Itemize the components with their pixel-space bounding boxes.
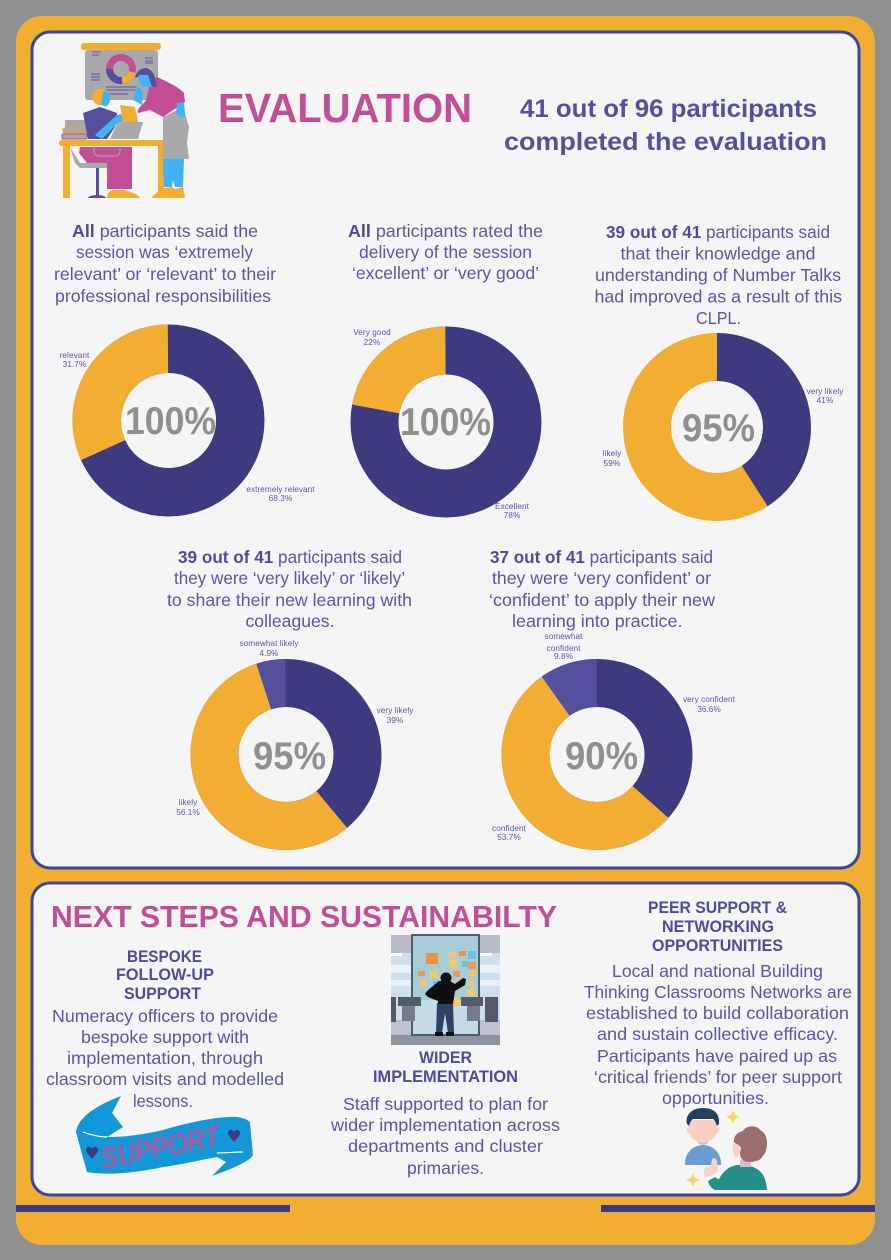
column: bespoke follow-up support: FOLLOW-UP bbox=[116, 966, 214, 984]
donut chart: sharing 95%: 39% bbox=[387, 716, 403, 725]
donut chart: knowledge 95%: 41% bbox=[817, 396, 833, 405]
text: knowledge statement: had improved as a result of this bbox=[594, 286, 842, 306]
donut chart: sharing 95% bbox=[176, 639, 414, 826]
text: sharing statement: colleagues. bbox=[246, 611, 334, 631]
donut chart: confidence 90%: very confident bbox=[683, 695, 736, 704]
participants summary: 41 out of 96 participants bbox=[520, 95, 817, 123]
donut chart: sharing 95%: very likely bbox=[377, 706, 414, 715]
text: relevance statement: professional responsibilities bbox=[55, 286, 271, 306]
text: knowledge statement bbox=[594, 222, 842, 328]
column: wider implementation: departments and cluster bbox=[348, 1136, 543, 1156]
participants summary bbox=[504, 95, 827, 156]
donut chart: confidence 90%: 9.8% bbox=[554, 652, 573, 661]
text: confidence statement: ‘confident’ to apply their new bbox=[489, 590, 715, 610]
icon: support ribbon: SUPPORT bbox=[98, 1120, 224, 1174]
column: bespoke follow-up support: Numeracy officers to provide bbox=[52, 1006, 278, 1026]
text: relevance statement: session was ‘extremely bbox=[76, 242, 253, 262]
donut chart: confidence 90%: 90% bbox=[565, 735, 638, 778]
text: confidence statement bbox=[489, 547, 715, 631]
column: wider implementation bbox=[330, 1049, 560, 1178]
donut chart: knowledge 95%: likely bbox=[603, 449, 622, 458]
donut chart: sharing 95%: 4.9% bbox=[260, 649, 278, 658]
text: confidence statement: learning into practice. bbox=[512, 611, 682, 631]
donut chart: relevance 100% bbox=[60, 349, 315, 503]
column: bespoke follow-up support bbox=[46, 948, 284, 1111]
text: relevance statement: relevant’ or ‘relevant’ to their bbox=[54, 264, 276, 284]
donut chart: knowledge 95% bbox=[603, 357, 844, 497]
donut chart: sharing 95%: likely bbox=[179, 798, 198, 807]
donut chart: delivery 100%: Excellent bbox=[495, 502, 530, 511]
donut chart: sharing 95%: 56.1% bbox=[176, 808, 200, 817]
donut chart: confidence 90% bbox=[492, 632, 736, 842]
donut chart: delivery 100%: 100% bbox=[400, 401, 491, 444]
column: peer support and networking: Thinking Classrooms Networks are bbox=[584, 982, 852, 1002]
column: peer support and networking: Local and national Building bbox=[612, 961, 823, 981]
column: peer support and networking: and sustain collective efficacy. bbox=[597, 1024, 838, 1044]
footer bar right bbox=[601, 1205, 875, 1212]
column: peer support and networking: NETWORKING bbox=[662, 918, 774, 936]
column: wider implementation: IMPLEMENTATION bbox=[373, 1068, 518, 1086]
column: peer support and networking: ‘critical friends’ for peer support bbox=[594, 1067, 842, 1087]
donut chart: delivery 100% bbox=[353, 328, 530, 520]
donut chart: sharing 95%: somewhat likely bbox=[240, 639, 299, 648]
text: sharing statement: they were ‘very likely’ or ‘likely’ bbox=[174, 568, 405, 588]
text: relevance statement bbox=[54, 221, 276, 306]
column: bespoke follow-up support: bespoke support with bbox=[81, 1027, 249, 1047]
text: sharing statement: to share their new learning with bbox=[167, 590, 412, 610]
donut chart: relevance 100%: 100% bbox=[125, 400, 216, 443]
donut chart: delivery 100%: Very good bbox=[353, 328, 391, 337]
icon: person at sticky note wall bbox=[391, 935, 500, 1045]
column: peer support and networking: established to build collaboration bbox=[586, 1003, 849, 1023]
column: wider implementation: wider implementation across bbox=[330, 1115, 560, 1135]
donut chart: knowledge 95%: 95% bbox=[682, 407, 755, 450]
donut chart: confidence 90%: somewhat bbox=[545, 632, 583, 641]
text: knowledge statement: 39 out of 41 participants said bbox=[606, 222, 830, 242]
donut chart: confidence 90%: 53.7% bbox=[497, 833, 521, 842]
donut chart: confidence 90%: confident bbox=[492, 824, 527, 833]
donut chart: relevance 100%: extremely relevant bbox=[246, 485, 315, 494]
donut chart: relevance 100%: 31.7% bbox=[63, 360, 86, 369]
donut chart: knowledge 95%: 59% bbox=[604, 459, 620, 468]
donut chart: confidence 90%: confident bbox=[547, 644, 581, 653]
footer bar left bbox=[16, 1205, 290, 1212]
column: wider implementation: Staff supported to plan for bbox=[343, 1094, 548, 1114]
column: wider implementation: WIDER bbox=[419, 1049, 472, 1067]
donut chart: relevance 100%: relevant bbox=[60, 351, 90, 360]
text: confidence statement: they were ‘very confident’ or bbox=[492, 568, 711, 588]
text: sharing statement bbox=[167, 547, 412, 631]
heading: next steps: NEXT STEPS AND SUSTAINABILTY bbox=[51, 899, 557, 934]
text: relevance statement: All participants said the bbox=[72, 221, 258, 241]
column: peer support and networking: opportunities. bbox=[662, 1088, 769, 1108]
column: peer support and networking bbox=[584, 899, 852, 1108]
title: EVALUATION bbox=[218, 85, 472, 131]
participants summary: completed the evaluation bbox=[504, 128, 827, 156]
text: knowledge statement: CLPL. bbox=[696, 308, 741, 328]
donut chart: relevance 100%: 68.3% bbox=[269, 494, 292, 503]
text: delivery statement: delivery of the session bbox=[359, 242, 532, 262]
donut chart: confidence 90%: 36.6% bbox=[697, 705, 721, 714]
donut chart: delivery 100%: 22% bbox=[364, 338, 380, 347]
column: bespoke follow-up support: BESPOKE bbox=[127, 948, 202, 966]
text: delivery statement: All participants rated the bbox=[348, 221, 543, 241]
text: knowledge statement: understanding of Number Talks bbox=[595, 265, 841, 285]
icon: two people thumbs up bbox=[685, 1108, 767, 1190]
donut chart: knowledge 95%: very likely bbox=[807, 387, 844, 396]
text: confidence statement: 37 out of 41 participants said bbox=[490, 547, 713, 567]
column: wider implementation: primaries. bbox=[407, 1158, 484, 1178]
column: peer support and networking: OPPORTUNITIES bbox=[652, 937, 783, 955]
column: bespoke follow-up support: implementation, through bbox=[67, 1048, 263, 1068]
column: bespoke follow-up support: classroom visits and modelled bbox=[46, 1069, 284, 1089]
donut chart: delivery 100%: 78% bbox=[504, 511, 520, 520]
icon: support ribbon bbox=[76, 1096, 253, 1176]
column: bespoke follow-up support: lessons. bbox=[133, 1091, 193, 1111]
text: delivery statement: ‘excellent’ or ‘very good’ bbox=[352, 263, 539, 283]
donut chart: sharing 95%: 95% bbox=[253, 735, 326, 778]
text: knowledge statement: that their knowledge and bbox=[620, 244, 816, 264]
text: sharing statement: 39 out of 41 participants said bbox=[178, 547, 402, 567]
panel: next steps bbox=[32, 883, 859, 1195]
column: peer support and networking: PEER SUPPORT & bbox=[648, 899, 787, 917]
text: delivery statement bbox=[348, 221, 543, 283]
panel: evaluation bbox=[32, 32, 859, 868]
column: bespoke follow-up support: SUPPORT bbox=[124, 985, 201, 1003]
icon: two people at a desk with a chart bbox=[59, 43, 189, 198]
column: peer support and networking: Participants have paired up as bbox=[597, 1046, 837, 1066]
